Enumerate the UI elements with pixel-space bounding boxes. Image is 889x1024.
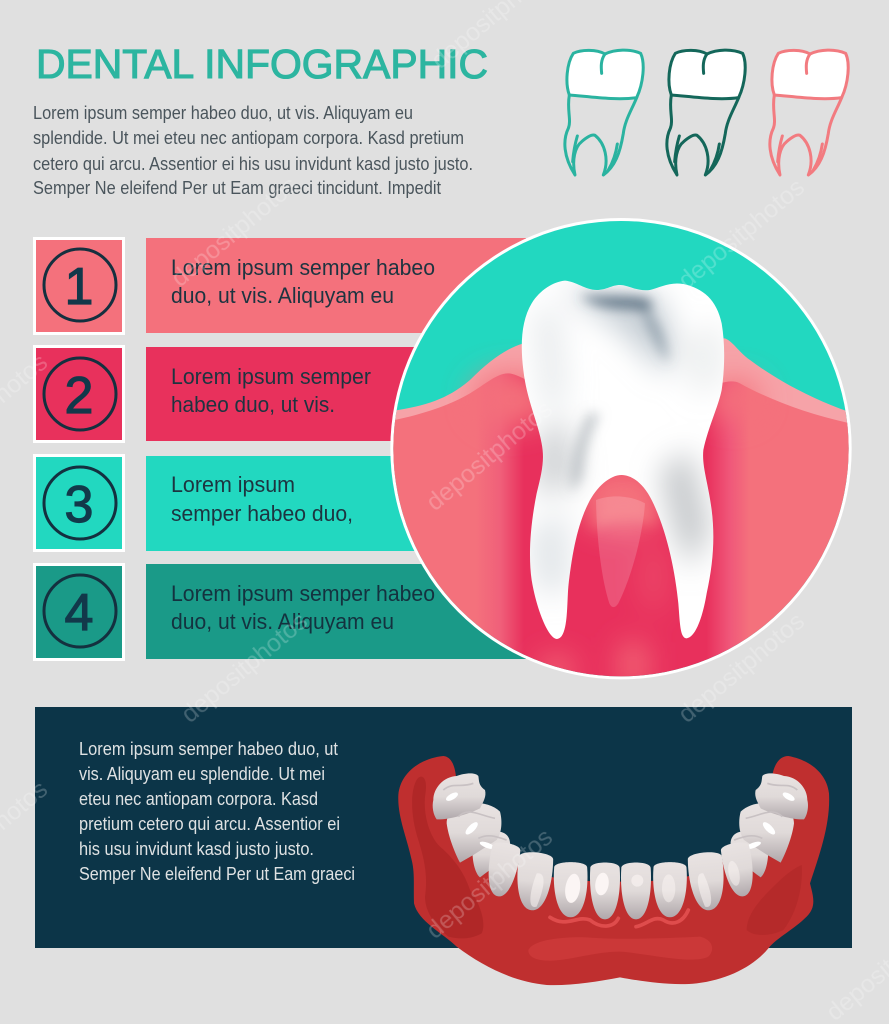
step 4: text (171, 581, 435, 634)
intro text block (33, 103, 473, 198)
step 3: bar (146, 456, 526, 551)
jaw gum (398, 756, 829, 985)
watermarks: depositphotos (673, 607, 810, 729)
step 4: text: Lorem ipsum semper habeo (171, 581, 435, 606)
step 4: bar (146, 564, 526, 659)
step 3: number badge (34, 456, 124, 550)
inner arch gum (592, 508, 656, 528)
step 3: number badge: 3 (65, 476, 93, 534)
step 2: bar (146, 347, 526, 441)
step 3: text: Lorem ipsum (171, 472, 295, 497)
watermarks: depositphotos (673, 173, 810, 295)
translucent root ghost (596, 496, 645, 607)
watermarks: depositphotos (176, 607, 313, 729)
step 1: text (171, 255, 435, 308)
step 2: number badge: 2 (65, 367, 93, 425)
lower jaw illustration (398, 756, 829, 985)
gum tissue (387, 373, 853, 690)
icon: teal tooth outline (565, 50, 643, 175)
frenulum marks (550, 910, 688, 927)
dark panel (35, 707, 852, 948)
watermarks: depositphotos (421, 395, 558, 517)
dark gum shading right (747, 865, 802, 935)
intro text block: splendide. Ut mei eteu nec antiopam corpora. Kasd pretium (33, 128, 464, 148)
step 2: text: habeo duo, ut vis. (171, 392, 335, 417)
step 4: number badge (34, 564, 124, 660)
panel text block: pretium cetero qui arcu. Assentior ei (79, 814, 340, 834)
panel text block: his usu invidunt kasd justo justo. (79, 839, 314, 859)
panel text block: Semper Ne eleifend Per ut Eam graeci (79, 864, 355, 884)
step 1: bar (146, 238, 526, 333)
step 1: number badge: 1 (65, 258, 93, 316)
pale gum margin (387, 338, 853, 477)
left molars (433, 773, 510, 877)
lighter gum tones (473, 373, 760, 687)
step 2: number badge (34, 346, 124, 442)
teal sky area (380, 210, 860, 690)
front teeth (484, 841, 758, 919)
step 1: text: duo, ut vis. Aliquyam eu (171, 283, 394, 308)
intro text block: cetero qui arcu. Assentior ei his usu invidunt kasd justo justo. (33, 154, 473, 174)
step 2: text: Lorem ipsum semper (171, 364, 371, 389)
title: DENTAL INFOGRAPHIC (36, 41, 488, 87)
intro text block: Lorem ipsum semper habeo duo, ut vis. Aliquyam eu (33, 103, 413, 123)
tooth cross-section circle (380, 210, 860, 690)
step 2: text (171, 364, 371, 417)
gum highlight (528, 937, 712, 961)
step 1: text: Lorem ipsum semper habeo (171, 255, 435, 280)
step 3: text (171, 472, 353, 526)
soft wide greys (530, 290, 723, 593)
dark gum shading left (412, 777, 483, 938)
icon: dark green tooth outline (667, 50, 745, 175)
step 3: text: semper habeo duo, (171, 501, 353, 526)
tight crown shadow (571, 295, 668, 493)
main tooth (522, 281, 724, 639)
watermarks: depositphotos (421, 823, 558, 945)
panel text block (79, 739, 355, 884)
step 4: number badge: 4 (65, 584, 93, 642)
tooth highlights (530, 860, 742, 907)
panel text block: Lorem ipsum semper habeo duo, ut (79, 739, 338, 759)
step 4: text: duo, ut vis. Aliquyam eu (171, 609, 394, 634)
panel text block: eteu nec antiopam corpora. Kasd (79, 789, 318, 809)
step 1: number badge (34, 238, 124, 334)
intro text block: Semper Ne eleifend Per ut Eam graeci tincidunt. Impedit (33, 178, 441, 198)
panel text block: vis. Aliquyam eu splendide. Ut mei (79, 764, 325, 784)
watermarks: depositphotos (166, 171, 303, 293)
right molars (731, 773, 808, 877)
icon: coral tooth outline (770, 50, 848, 175)
